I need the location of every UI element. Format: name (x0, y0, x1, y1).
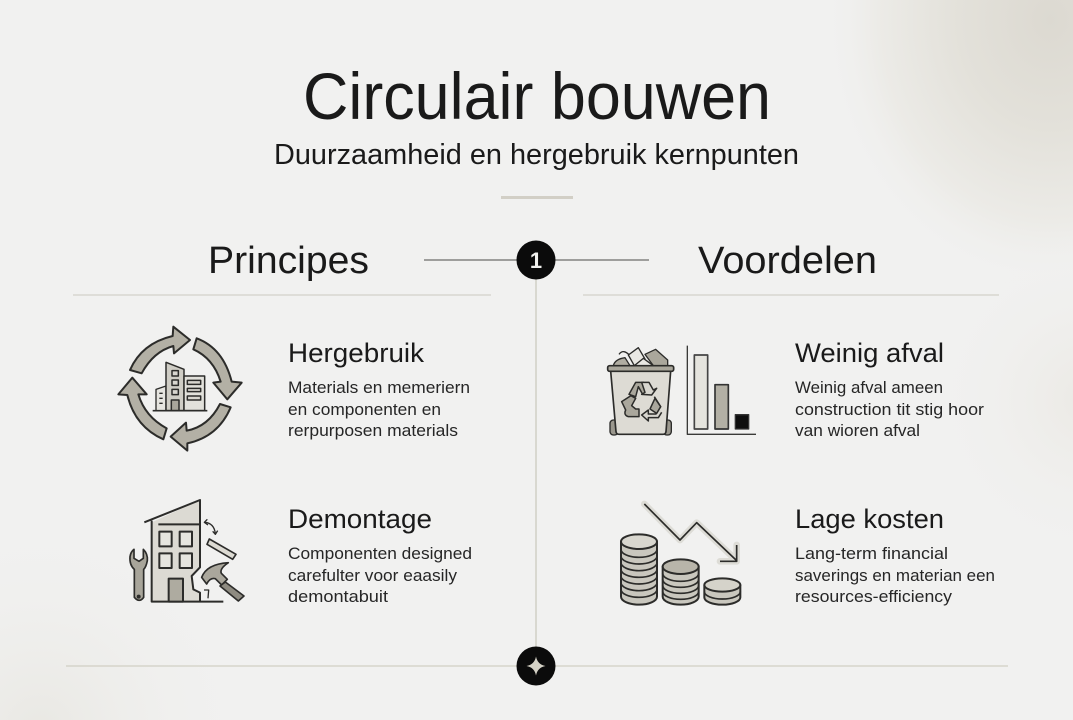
heading: Principes: Principes (208, 240, 369, 282)
text block: Hergebruik (288, 338, 470, 440)
text block: Lage kosten: resources-efficiency (795, 588, 953, 606)
text block: Lage kosten: Lang-term financial (795, 545, 948, 563)
text block: Demontage (288, 504, 472, 606)
text block: Demontage: Componenten designed (288, 545, 472, 563)
number badge: 1 (530, 248, 542, 273)
icon: coin stacks with falling arrow (621, 504, 740, 605)
text block: Lage kosten: saverings en materian een (795, 567, 995, 585)
text block: Hergebruik: Hergebruik (288, 338, 425, 368)
text block: Weinig afval: construction tit stig hoor (795, 401, 985, 419)
number badge (516, 240, 556, 280)
icon: recycling arrows around building (118, 327, 242, 451)
text block: Hergebruik: rerpurposen materials (288, 422, 458, 440)
text block: Weinig afval: Weinig afval (795, 338, 944, 368)
icon: building disassembly with tools (130, 500, 244, 602)
text block: Lage kosten: Lage kosten (795, 504, 944, 534)
subtitle: Duurzaamheid en hergebruik kernpunten (274, 139, 799, 171)
text block: Demontage: demontabuit (288, 588, 388, 606)
text block: Demontage: Demontage (288, 504, 432, 534)
star badge (516, 646, 556, 686)
text block: Hergebruik: Materials en memeriern (288, 379, 470, 397)
text block: Weinig afval (795, 338, 985, 440)
text block: Demontage: carefulter voor eaasily (288, 567, 458, 585)
text block: Lage kosten (795, 504, 995, 606)
heading: Voordelen: Voordelen (698, 240, 877, 282)
text block: Hergebruik: en componenten en (288, 401, 441, 419)
icon: recycling bin with descending bars (608, 346, 756, 435)
text block: Weinig afval: van wioren afval (795, 422, 920, 440)
text block: Weinig afval: Weinig afval ameen (795, 379, 943, 397)
title: Circulair bouwen (303, 59, 771, 133)
